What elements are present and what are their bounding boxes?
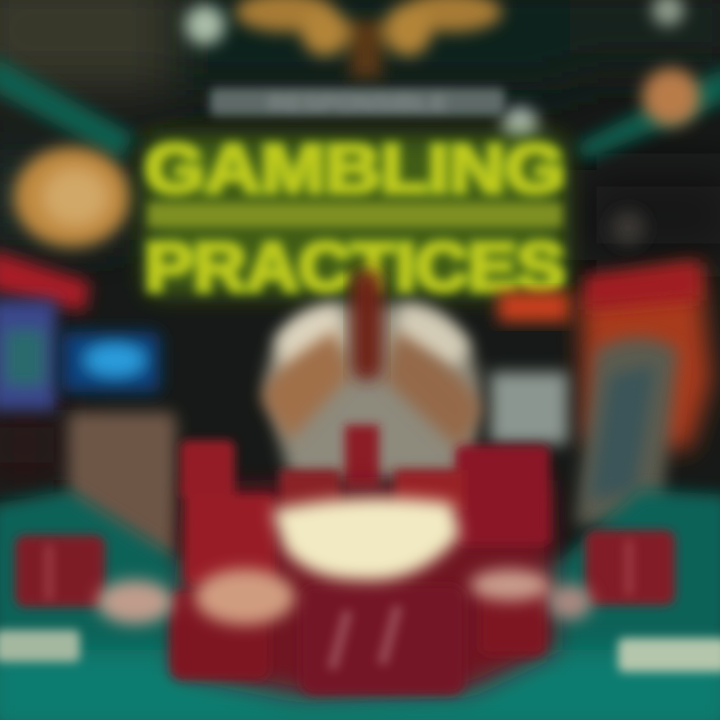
- small subtitle band: RESPONSIBLE: [268, 90, 448, 118]
- golden coin left: [14, 147, 130, 247]
- orange coin right: [642, 68, 700, 126]
- title: gambling practices: [145, 131, 565, 305]
- red poker chip stacks: [15, 440, 675, 695]
- brown card stack left: [68, 412, 176, 562]
- pale panel right of person: [490, 372, 568, 444]
- blue card left: [0, 300, 56, 410]
- pale chip tops: [97, 569, 592, 625]
- title: gambling practices: PRACTICES: [145, 229, 565, 305]
- chip highlights: [45, 540, 633, 670]
- central white plate: [272, 498, 460, 580]
- orange accent under title: [498, 292, 570, 322]
- title: gambling practices: GAMBLING: [145, 131, 565, 207]
- top golden ornament: [235, 0, 502, 78]
- white table labels: [0, 630, 720, 672]
- red flag left: [0, 250, 90, 312]
- green felt table: [0, 490, 720, 720]
- faint wheel right: [610, 210, 646, 246]
- blue glowing sign: [62, 332, 160, 392]
- teal ribbons: [0, 55, 720, 160]
- floating pale orbs: [185, 0, 684, 143]
- person in white shirt: [262, 270, 482, 490]
- right red and orange card: [575, 262, 712, 525]
- dark red chip mass behind the stacks: [175, 480, 555, 695]
- small subtitle band: [210, 88, 505, 118]
